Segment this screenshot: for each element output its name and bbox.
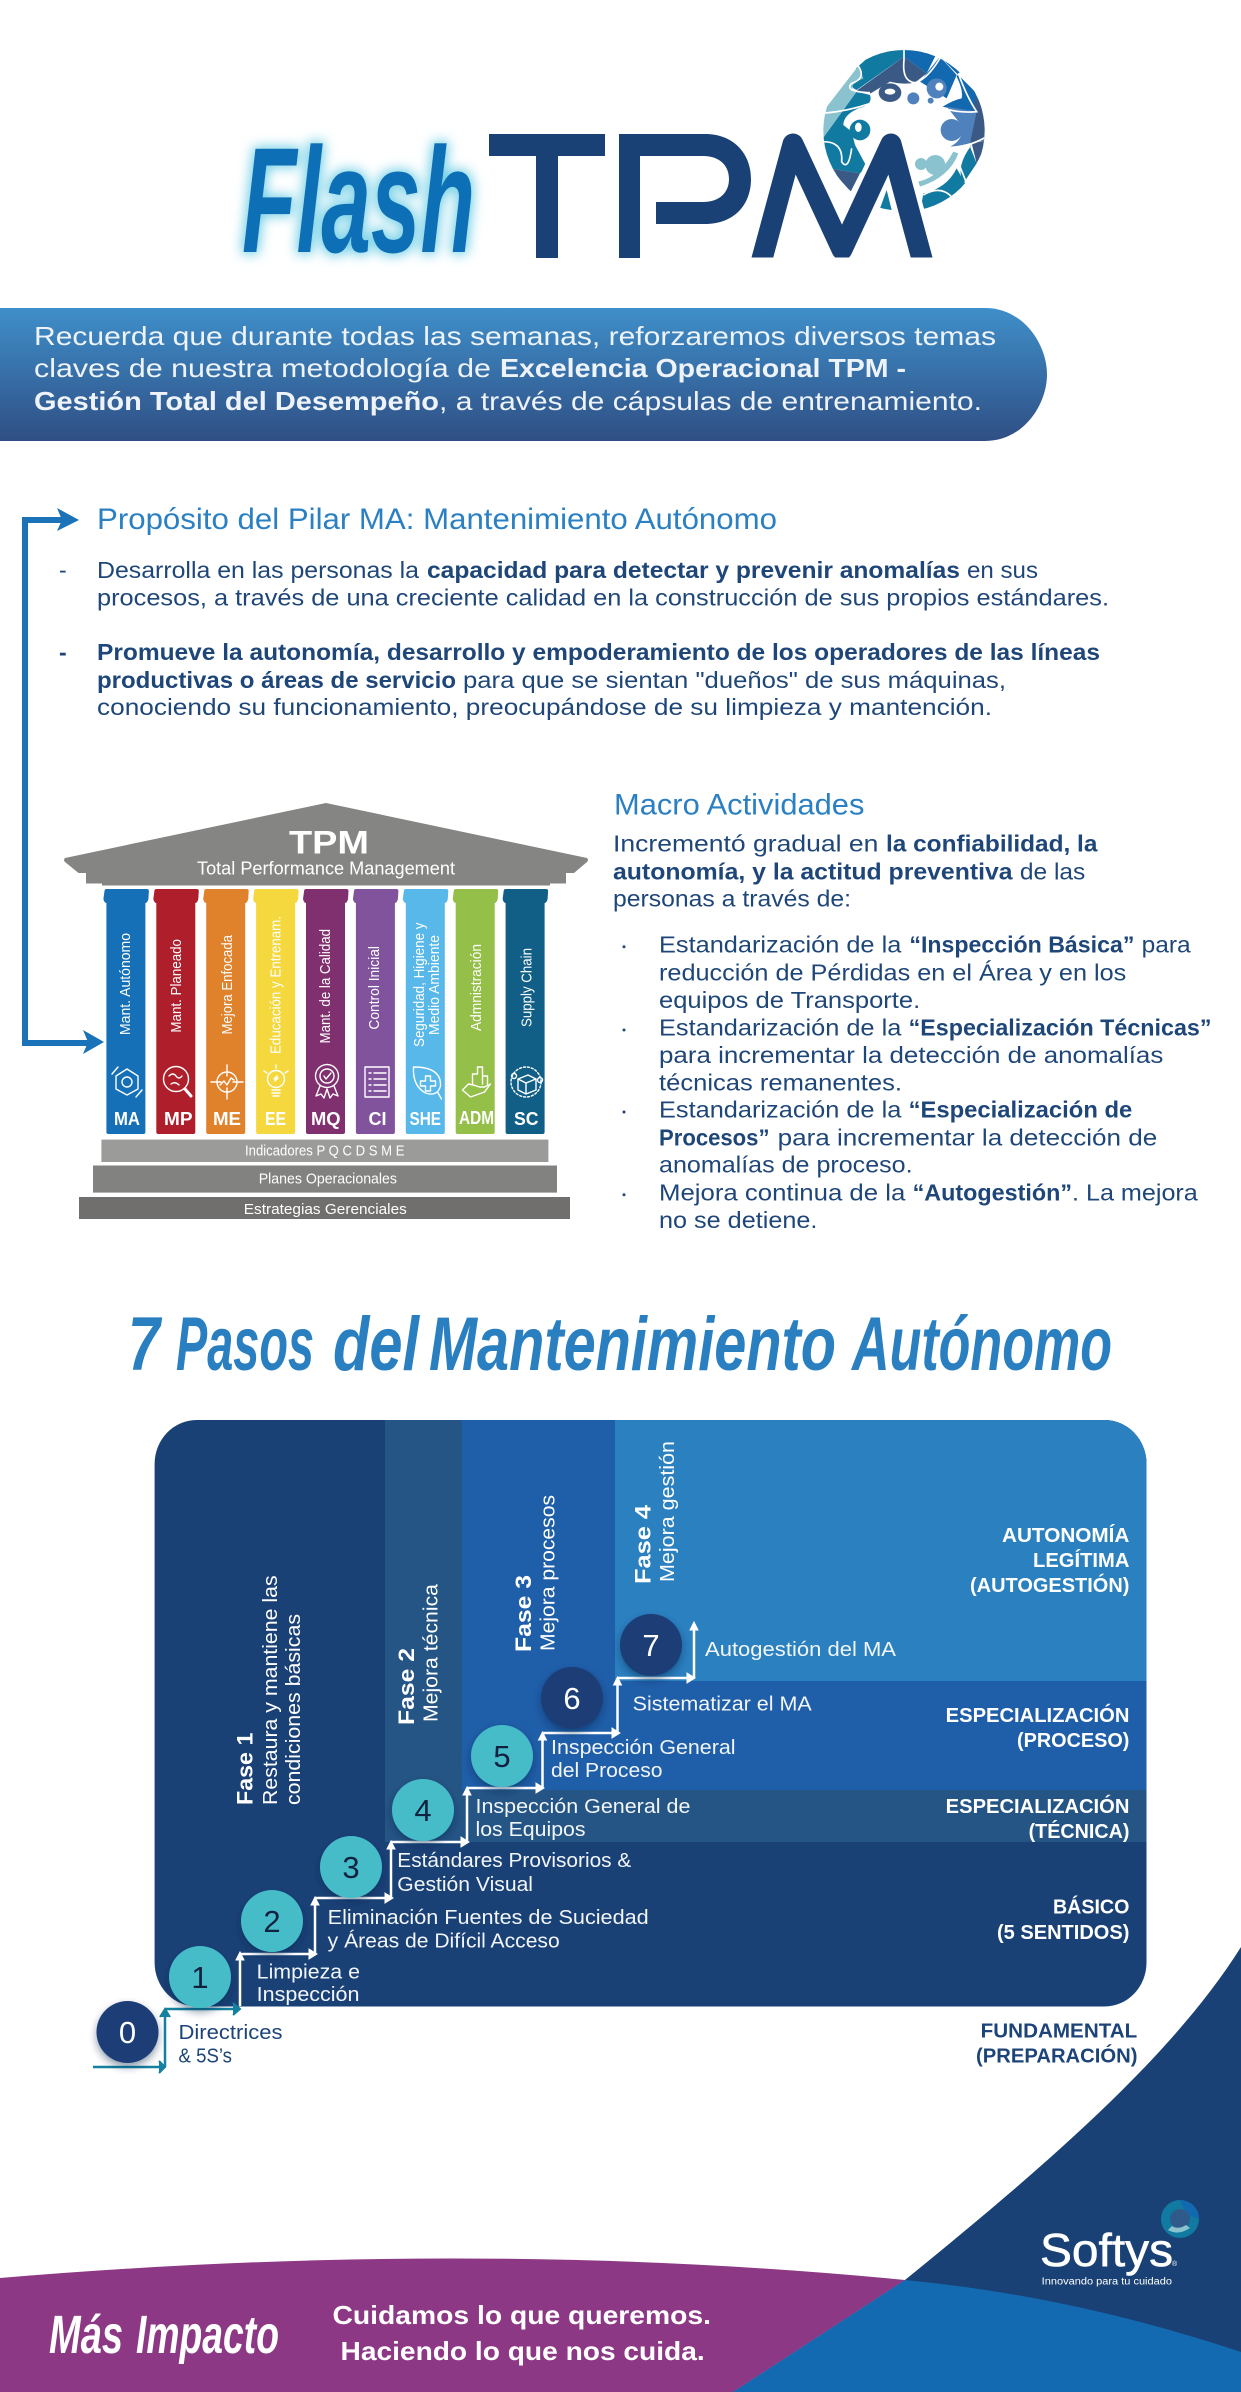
purpose text: procesos, a través de una creciente calidad en la construcción de sus propios estándares. (97, 584, 1109, 610)
pillar names: Seguridad, Higiene y (412, 922, 428, 1047)
heading: 7 Pasos del Mantenimiento Autónomo: Pasos (176, 1302, 314, 1387)
macro activities intro: personas a través de: (613, 886, 851, 912)
step 4: 4 (414, 1793, 432, 1828)
footer slogan: Más Impacto (49, 2305, 279, 2365)
base: Estrategias Gerenciales (79, 1197, 570, 1219)
icon: MQ rosette (316, 1064, 338, 1098)
step labels: Limpieza e (257, 1962, 360, 1984)
base: Indicadores (101, 1140, 548, 1162)
heading: 7 Pasos del Mantenimiento Autónomo (128, 1302, 1112, 1387)
Fase 4: Mejora gestión (657, 1441, 679, 1582)
macro activities intro: de las (1020, 858, 1085, 884)
temple roof (64, 803, 588, 886)
step 2: 2 (263, 1904, 281, 1939)
pillar names: Admnistración (469, 944, 485, 1031)
word: Flash: Flash (242, 116, 475, 284)
pillar names: Mant. de la Calidad (318, 929, 334, 1044)
item: especialización de procesos: Estandarización de la (659, 1097, 902, 1123)
Fase 2: Mejora técnica (421, 1583, 443, 1722)
footer tagline: Haciendo lo que nos cuida. (340, 2336, 705, 2366)
level label: fundamental (976, 2020, 1138, 2067)
heading: 7 Pasos del Mantenimiento Autónomo: 7 (128, 1302, 163, 1387)
heading: 7 Pasos del Mantenimiento Autónomo: del (333, 1302, 420, 1387)
icon: CI checklist (365, 1067, 389, 1097)
icon: SC box (511, 1067, 542, 1097)
item: autogestión (622, 1180, 1198, 1233)
Fase 3: Fase 3 (511, 1575, 536, 1652)
step 0 (96, 2001, 158, 2063)
step 3 (320, 1836, 382, 1898)
navy swoosh (733, 1947, 1241, 2392)
macro activities intro: Incrementó gradual en (613, 831, 878, 857)
Softys logo: Innovando para tu cuidado (1042, 2276, 1172, 2287)
item: especialización técnicas: para incrementar la detección de anomalías (659, 1042, 1163, 1068)
level labels: AUTONOMÍA (1002, 1524, 1129, 1547)
icon: MP magnifier (164, 1066, 191, 1096)
macro activities list (622, 932, 1212, 1233)
footer tagline (332, 2300, 711, 2366)
globe emblem (822, 47, 988, 213)
Fase 2 (394, 1583, 443, 1725)
level labels: (TÉCNICA) (1029, 1820, 1129, 1843)
footer slogan: Más Impacto: Impacto (136, 2305, 279, 2365)
icon: ME target (211, 1065, 243, 1099)
pillar abbreviations: CI (368, 1109, 386, 1129)
item: inspección básica: reducción de Pérdidas en el Área y en los (659, 960, 1126, 986)
Softys logo (1040, 2200, 1199, 2287)
step 0: 0 (119, 2015, 136, 2050)
level labels: LEGÍTIMA (1033, 1549, 1129, 1572)
Fase 1 (233, 1575, 305, 1805)
step 0 label (178, 2022, 282, 2068)
step 7: 7 (642, 1628, 660, 1663)
item: especialización de procesos (622, 1097, 1157, 1178)
pillar abbreviations: MP (164, 1109, 192, 1129)
Fase 4 (631, 1441, 679, 1584)
item: especialización de procesos: para incrementar la detección de (778, 1125, 1157, 1151)
footer tagline: Cuidamos lo que queremos. (332, 2300, 711, 2330)
heading: 7 Pasos del Mantenimiento Autónomo: Autónomo (851, 1302, 1112, 1387)
step labels: Inspección (257, 1984, 360, 2006)
banner text: Gestión Total del Desempeño (34, 386, 439, 416)
pillar abbreviations: SC (514, 1109, 538, 1129)
purpose text: capacidad para detectar y prevenir anomalías (427, 557, 960, 583)
icon: MA gears (112, 1067, 142, 1097)
base: Estrategias Gerenciales: Estrategias Gerenciales (244, 1201, 407, 1218)
step arrows (93, 1622, 698, 2073)
macro activities intro (613, 831, 1098, 912)
heading: Macro Actividades: Macro Actividades (614, 788, 864, 821)
step 7 (620, 1614, 682, 1676)
purpose text: Desarrolla en las personas la (97, 557, 419, 583)
step labels: Eliminación Fuentes de Suciedad (328, 1907, 649, 1929)
step 0 label: & 5S’s (178, 2046, 232, 2068)
step 0 label: Directrices (178, 2022, 282, 2044)
banner text: , a través de cápsulas de entrenamiento. (439, 386, 982, 416)
step 4 (392, 1779, 454, 1841)
item: especialización técnicas (622, 1015, 1212, 1096)
Fase 2: Fase 2 (394, 1648, 419, 1725)
step labels: Inspección General de (476, 1796, 690, 1818)
logo: Flash TPM (242, 47, 988, 284)
item: inspección básica: Estandarización de la (659, 932, 902, 958)
step labels (257, 1639, 897, 2006)
level labels: ESPECIALIZACIÓN (946, 1794, 1129, 1818)
pillar abbreviations: MQ (311, 1109, 341, 1129)
pillar abbreviations: MA (114, 1109, 140, 1129)
purpose text: - (59, 639, 67, 665)
Fase 3 (511, 1495, 560, 1652)
pillar names: Medio Ambiente (427, 935, 443, 1035)
purpose text: en sus (967, 557, 1038, 583)
pillar abbreviations: EE (265, 1109, 286, 1129)
icon: EE light bulb (264, 1065, 288, 1096)
Fase 3: Mejora procesos (538, 1495, 560, 1651)
footer shapes (0, 1947, 1241, 2392)
base: Planes Operacionales (93, 1166, 557, 1193)
level labels: (AUTOGESTIÓN) (970, 1573, 1129, 1597)
purpose text: para que se sientan "dueños" de sus máquinas, (463, 667, 1006, 693)
step labels: Sistematizar el MA (633, 1694, 812, 1716)
pillar names: Control Inicial (367, 946, 383, 1030)
arrow: pillar MA to purpose (22, 508, 104, 1054)
pillar names (118, 916, 536, 1054)
level labels (946, 1524, 1129, 1944)
chart: 7 steps background (154, 1420, 1148, 2007)
heading: 7 Pasos del Mantenimiento Autónomo: Mantenimiento (429, 1302, 836, 1387)
item: autogestión: . La mejora (1072, 1180, 1198, 1206)
level labels: (PROCESO) (1017, 1730, 1129, 1752)
arrow: steps 1 to 7 (236, 1622, 698, 2006)
heading: purpose of pillar MA: Propósito del Pilar MA: Mantenimiento Autónomo (97, 503, 777, 536)
item: especialización de procesos: “Especialización de (909, 1097, 1132, 1123)
temple roof: Total Performance Management (197, 858, 455, 878)
small globe (1161, 2200, 1199, 2238)
pillar names: Mejora Enfocada (220, 934, 236, 1034)
step 6: 6 (563, 1681, 581, 1716)
pillar names: Educación y Entrenam. (268, 916, 284, 1054)
pillar abbreviations (114, 1108, 538, 1129)
step 1: 1 (191, 1960, 209, 1995)
base: Planes Operacionales: Planes Operacionales (259, 1171, 397, 1188)
Fase 1: Fase 1 (233, 1733, 258, 1805)
macro activities intro: la confiabilidad, la (886, 831, 1098, 857)
Fase 1: condiciones básicas (283, 1614, 305, 1805)
level labels: (5 SENTIDOS) (997, 1922, 1129, 1944)
step 5: 5 (493, 1739, 511, 1774)
intro banner (0, 308, 1047, 441)
item: especialización técnicas: “Especialización Técnicas” (909, 1015, 1212, 1041)
macro activities intro: autonomía, y la actitud preventiva (613, 858, 1013, 884)
purpose text: Promueve la autonomía, desarrollo y empoderamiento de los operadores de las líneas (97, 639, 1100, 665)
level labels: BÁSICO (1053, 1895, 1129, 1918)
step 2 (241, 1890, 303, 1952)
pillar abbreviations: SHE (410, 1109, 441, 1129)
item: especialización de procesos: Procesos” (659, 1125, 770, 1151)
purpose text: conociendo su funcionamiento, preocupándose de su limpieza y mantención. (97, 694, 992, 720)
pillar abbreviations: ADM (459, 1108, 494, 1128)
item: especialización de procesos: anomalías de proceso. (659, 1152, 913, 1178)
blue band (733, 2280, 1241, 2392)
step labels: y Áreas de Difícil Acceso (328, 1929, 560, 1952)
item: especialización técnicas: Estandarización de la (659, 1015, 902, 1041)
purpose text (59, 557, 1109, 720)
base: Indicadores: Indicadores P Q C D S M E (245, 1142, 404, 1160)
purpose text: - (59, 557, 67, 583)
item: inspección básica: equipos de Transporte. (659, 987, 920, 1013)
item: inspección básica: “Inspección Básica” (909, 932, 1134, 958)
step 1 (169, 1946, 231, 2008)
letters: T and P (489, 134, 751, 258)
level labels: ESPECIALIZACIÓN (946, 1703, 1129, 1727)
step labels: Gestión Visual (397, 1874, 533, 1896)
step labels: Estándares Provisorios & (397, 1850, 632, 1872)
step labels: los Equipos (476, 1819, 586, 1841)
step 3: 3 (342, 1850, 360, 1885)
Softys logo: Softys (1040, 2224, 1173, 2276)
Fase 1: Restaura y mantiene las (260, 1575, 282, 1805)
pillar shafts (103, 889, 548, 1134)
banner text: Excelencia Operacional TPM - (500, 353, 906, 383)
icon: ADM hand and bars (462, 1067, 490, 1097)
item: inspección básica (622, 932, 1191, 1013)
Softys logo: ® (1172, 2260, 1178, 2268)
Fase 4: Fase 4 (631, 1504, 656, 1584)
item: inspección básica: para (1142, 932, 1191, 958)
item: especialización técnicas: técnicas remanentes. (659, 1070, 902, 1096)
item: autogestión: no se detiene. (659, 1207, 817, 1233)
banner text: Recuerda que durante todas las semanas, reforzaremos diversos temas (34, 321, 996, 351)
phase labels (233, 1441, 679, 1805)
pillar names: Supply Chain (520, 948, 536, 1027)
step labels: del Proceso (551, 1760, 662, 1782)
arrow: step 0 (93, 2003, 240, 2073)
step 5 (471, 1725, 533, 1787)
diagram: TPM temple (64, 803, 588, 1219)
pillar names: Mant. Autónomo (118, 933, 134, 1035)
step labels: Autogestión del MA (705, 1639, 897, 1661)
letter: M (759, 144, 925, 270)
item: autogestión: Mejora continua de la (659, 1180, 906, 1206)
purpose text: productivas o áreas de servicio (97, 667, 456, 693)
banner text: claves de nuestra metodología de (34, 353, 491, 383)
step labels: Inspección General (551, 1737, 736, 1759)
purple band (0, 2258, 905, 2392)
footer slogan: Más Impacto: Más (49, 2305, 123, 2365)
pillar names: Mant. Planeado (169, 939, 185, 1033)
level label: fundamental: (PREPARACIÓN) (976, 2043, 1138, 2067)
icon: SHE leaf (413, 1067, 442, 1099)
pillar abbreviations: ME (213, 1109, 241, 1129)
item: autogestión: “Autogestión” (913, 1180, 1072, 1206)
level label: fundamental: FUNDAMENTAL (981, 2020, 1137, 2042)
step circles (96, 1614, 682, 2063)
step 6 (541, 1667, 603, 1729)
banner text (34, 321, 996, 416)
temple roof: TPM (289, 824, 369, 860)
